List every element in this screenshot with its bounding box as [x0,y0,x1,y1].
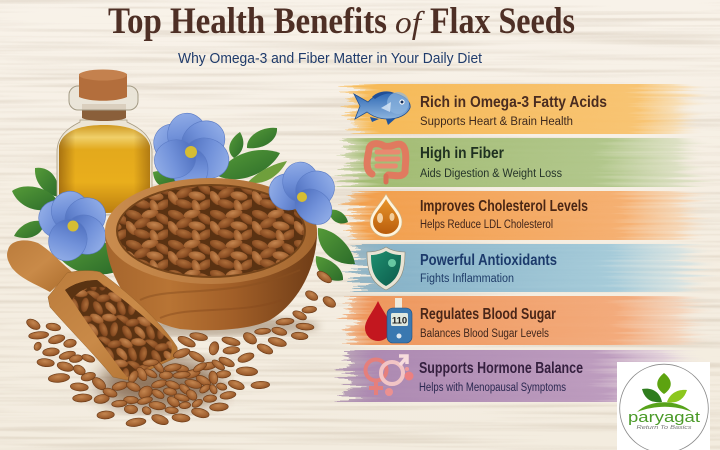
leaves [12,128,355,281]
logo: paryagat: Return To Basics [636,425,692,431]
panel: benefit bands [348,84,706,402]
oil bottle [57,70,152,215]
text: blood sugar: Balances Blood Sugar Levels [420,328,549,340]
logo: paryagat [617,362,710,450]
text: hormone: Helps with Menopausal Symptoms [419,382,566,394]
icon: oil drop [370,194,402,237]
text: fiber: Aids Digestion & Weight Loss [420,168,562,180]
loose seeds [25,269,338,428]
text: fiber: High in Fiber [420,145,504,162]
text: blood sugar [420,306,556,340]
band: antioxidants [356,244,706,292]
illustration: flax seeds still life [7,70,355,428]
bowl [105,178,317,330]
text: omega-3 [420,94,607,128]
band: hormone [348,350,698,402]
text: antioxidants [420,252,557,285]
title: of [395,4,425,40]
shadow: bowl and seed pile [98,317,320,410]
subtitle: Why Omega-3 and Fiber Matter in Your Daily Diet [178,51,482,67]
icon: logo leaves [637,373,692,412]
text: cholesterol: Helps Reduce LDL Cholesterol [420,219,553,231]
band: cholesterol [352,191,706,240]
text: cholesterol: Improves Cholesterol Levels [420,198,588,215]
logo: paryagat: paryagat [628,410,700,426]
title [108,1,575,42]
text: antioxidants: Fights Inflammation [420,273,514,285]
icon: blood drop and glucose meter: 110 [392,316,407,326]
flower left [32,188,113,266]
text: fiber [420,145,562,180]
text: omega-3: Supports Heart & Brain Health [420,116,573,128]
scoop [7,240,177,380]
icon: blood drop and glucose meter [365,298,412,343]
text: omega-3: Rich in Omega-3 Fatty Acids [420,94,607,111]
flower top [146,111,234,190]
text: cholesterol [420,198,588,231]
title: Flax Seeds [430,1,575,42]
band: fiber [348,138,706,187]
band: omega-3 [352,84,704,134]
text: hormone [419,360,583,394]
icon: gender symbols [366,356,414,396]
icon: intestine [367,144,406,182]
flower right [264,161,341,232]
title: Top Health Benefits [108,1,387,42]
band: blood sugar [350,296,706,345]
text: hormone: Supports Hormone Balance [419,360,583,377]
icon: shield [367,247,405,290]
text: blood sugar: Regulates Blood Sugar [420,306,556,323]
icon: fish [354,91,410,125]
text: antioxidants: Powerful Antioxidants [420,252,557,269]
